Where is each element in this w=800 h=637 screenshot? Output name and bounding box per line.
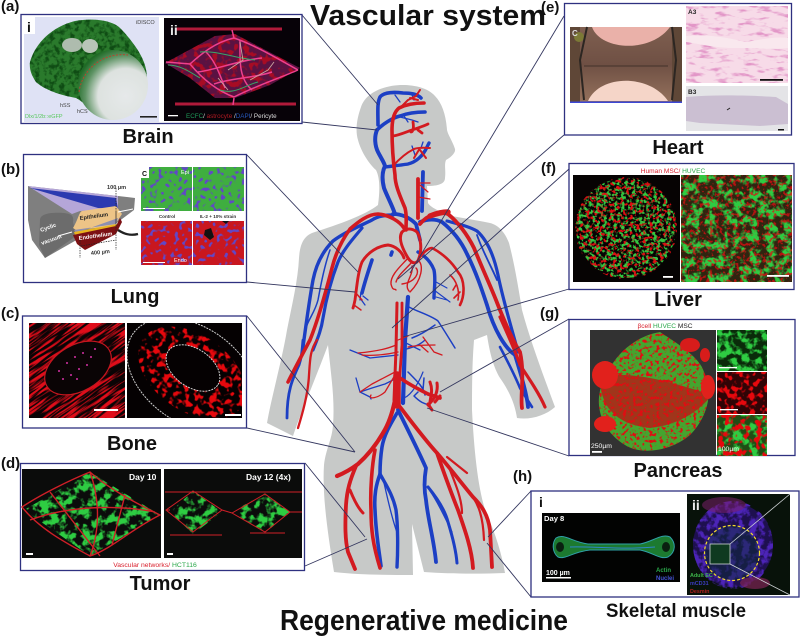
image i: cerebral organoid: i <box>27 19 31 35</box>
Bone heading: Bone <box>107 433 157 455</box>
image ii: neurovascular unit <box>164 18 300 121</box>
pancreas detail: merged: 100µm <box>718 446 739 453</box>
diagram labels: Endothelium <box>78 231 113 242</box>
diagram labels: Cyclic <box>40 223 57 234</box>
brain image labels: hCS <box>77 109 88 115</box>
veins (blue) <box>287 92 532 567</box>
left micrograph: red fibres <box>0 246 205 497</box>
magnified organoid image <box>681 175 792 282</box>
image i: cerebral organoid <box>24 17 159 122</box>
muscle bundle image <box>542 513 680 582</box>
panel label (f): (f) <box>541 160 556 177</box>
Brain heading: Brain <box>122 126 174 148</box>
diagram labels: Epithelium <box>79 212 109 222</box>
panel label (g): (g) <box>540 305 559 322</box>
lung micrographs: C <box>142 171 147 178</box>
arteries and veins <box>287 90 545 569</box>
histology B3: B3 <box>688 89 697 96</box>
liver caption: Human MSC/ HUVEC <box>641 168 705 175</box>
Tumor heading: Tumor <box>130 573 191 595</box>
Skeletal muscle heading: Skeletal muscle <box>606 601 746 622</box>
lung chip diagram <box>28 185 138 258</box>
brain image labels: hSS <box>60 103 71 109</box>
lung micrographs: Endo <box>174 258 187 264</box>
lung micrographs <box>141 167 244 265</box>
frame <box>22 316 246 428</box>
panel (g): pancreas <box>540 305 795 482</box>
vascularized graft image: ii <box>692 497 700 513</box>
frame <box>24 154 246 282</box>
pancreas detail: red channel <box>717 372 767 414</box>
head vein branches <box>395 95 423 155</box>
pancreas caption: βcell HUVEC MSC <box>637 323 693 330</box>
brain image labels: iDISCO <box>136 20 155 26</box>
frame <box>569 164 794 290</box>
panel (h): skeletal muscle: i <box>539 494 543 510</box>
lung micrographs: IL-2 + 10% strain <box>200 214 236 219</box>
panel label (h): (h) <box>513 468 532 485</box>
histology A3 <box>686 6 788 83</box>
frame <box>569 320 795 456</box>
lung micrographs: Control <box>159 214 175 219</box>
day 12 micrograph: Day 12 (4x) <box>246 472 291 482</box>
Heart heading: Heart <box>652 137 704 159</box>
pancreas detail: green channel <box>717 330 767 371</box>
frame <box>531 491 799 597</box>
diagram labels: 400 µm <box>91 249 110 257</box>
vascularized graft image: mCD31 <box>690 581 709 587</box>
panel label (b): (b) <box>1 161 20 178</box>
panel (d): tumor <box>1 455 304 595</box>
main title top: Vascular system <box>310 0 546 32</box>
tissue photograph <box>570 27 682 103</box>
panel (h): skeletal muscle <box>513 468 799 622</box>
vascularized graft image: Desmin <box>690 589 709 595</box>
whole organoid image <box>573 175 680 282</box>
body silhouette <box>267 85 555 575</box>
day 10 micrograph <box>22 469 161 558</box>
main title bottom: Regenerative medicine <box>280 605 568 637</box>
panel (c): bone <box>0 246 279 497</box>
panel label (d): (d) <box>1 455 20 472</box>
vascularized graft image: Adult EC <box>690 573 713 579</box>
day 12 micrograph <box>164 469 302 558</box>
panel (a): brain <box>1 0 302 148</box>
image ii: neurovascular unit: ii <box>170 22 178 38</box>
arteries (red) <box>288 90 545 569</box>
tissue photograph: C <box>572 29 578 38</box>
connector lines: panels to organs <box>247 15 569 597</box>
muscle bundle image: Nuclei <box>656 576 674 582</box>
frame <box>564 4 792 135</box>
diagram labels: vacuum <box>41 234 63 247</box>
vascularized graft image <box>687 494 790 595</box>
Lung heading: Lung <box>111 286 159 308</box>
panel (e): heart <box>541 0 792 159</box>
Liver heading: Liver <box>654 289 702 311</box>
Pancreas heading: Pancreas <box>634 460 722 482</box>
frame <box>20 464 304 570</box>
pancreatic islet image: 250µm <box>591 443 612 450</box>
histology A3: A3 <box>688 9 697 16</box>
right micrograph: ring of cells <box>105 294 279 456</box>
tumor caption: Vascular networks/ HCT116 <box>113 562 197 569</box>
pancreatic islet image <box>590 330 716 456</box>
image i: cerebral organoid: Dlx/1/2b::eGFP <box>25 114 63 120</box>
muscle bundle image: Actin <box>656 568 671 574</box>
panel (f): liver <box>541 160 794 311</box>
lung micrographs: Epi <box>181 170 189 176</box>
diagram labels: 100 µm <box>107 185 126 191</box>
pancreas detail: merged <box>717 415 767 456</box>
ii caption: ECFC/ astrocyte /DAPI/ Pericyte <box>186 113 277 120</box>
brain image labels <box>60 20 155 115</box>
day 10 micrograph: Day 10 <box>129 472 157 482</box>
panel label (c): (c) <box>1 305 19 322</box>
histology B3 <box>686 86 788 131</box>
muscle bundle image: Day 8 <box>544 514 564 523</box>
muscle bundle image: 100 µm <box>546 570 570 577</box>
frame <box>21 14 302 124</box>
diagram labels <box>40 185 126 257</box>
panel (b): lung <box>1 154 246 308</box>
